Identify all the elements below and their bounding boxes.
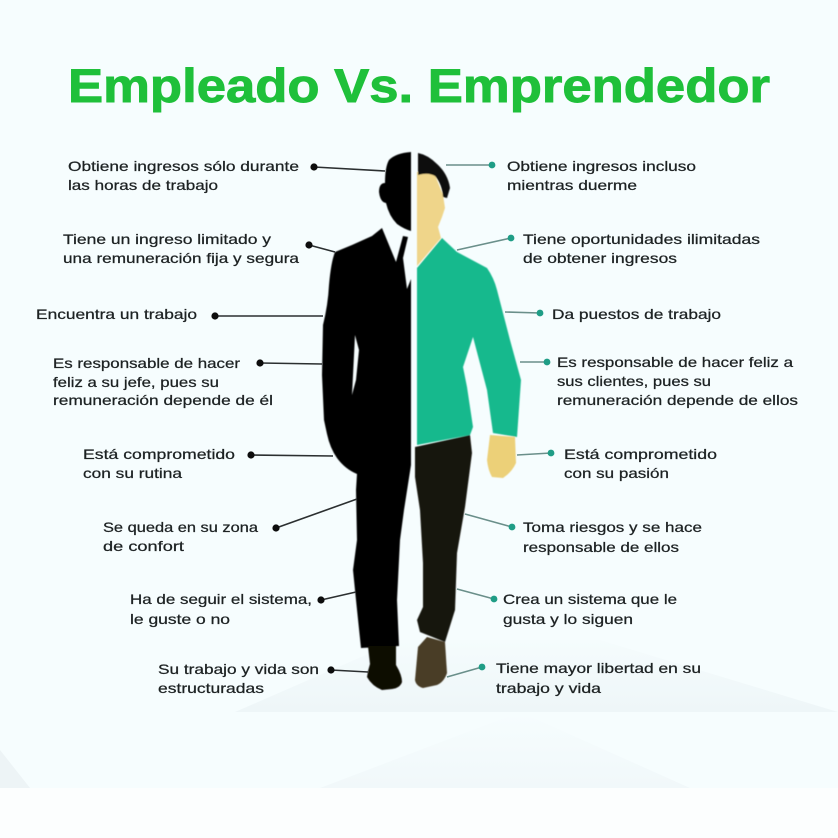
entrepreneur hand [487,435,516,478]
text: employee column: Obtiene ingresos sólo durante [68,158,299,174]
text: employee column: Se queda en su zona [103,519,258,535]
text: employee column: Su trabajo y vida son [158,661,319,677]
text: employee column [36,158,319,696]
text: entrepreneur column: sus clientes, pues su [557,373,711,389]
text: entrepreneur column: Tiene oportunidades ilimitadas [523,231,760,247]
title: Empleado Vs. Emprendedor [68,59,770,112]
employee shoe [367,646,402,690]
text: entrepreneur column: Crea un sistema que le [503,591,677,607]
text: entrepreneur column: Tiene mayor libertad en su [496,660,701,676]
text: employee column: de confort [103,538,184,554]
text: employee column: las horas de trabajo [68,177,218,193]
entrepreneur boot [415,637,447,688]
text: entrepreneur column: Da puestos de trabajo [552,306,721,322]
connectors: employee [211,163,385,674]
text: entrepreneur column: de obtener ingresos [523,250,677,266]
employee head [379,152,411,231]
text: entrepreneur column: gusta y lo siguen [503,611,633,627]
text: entrepreneur column: trabajo y vida [496,680,601,696]
entrepreneur hair [418,153,450,198]
entrepreneur skin [417,170,445,266]
text: employee column: feliz a su jefe, pues su [53,374,219,390]
text: employee column: remuneración depende de él [53,392,273,408]
text: entrepreneur column: remuneración depende de ellos [557,392,798,408]
entrepreneur shirt [417,238,521,445]
text: employee column: estructuradas [158,680,264,696]
entrepreneur trousers [415,435,472,642]
figure: entrepreneur [415,153,521,688]
text: entrepreneur column: mientras duerme [507,177,637,193]
text: employee column: Ha de seguir el sistema, [130,591,312,607]
text: employee column: una remuneración fija y segura [63,250,299,266]
text: employee column: con su rutina [83,465,182,481]
text: entrepreneur column: Está comprometido [564,446,717,462]
text: employee column: Es responsable de hacer [53,355,240,371]
text: entrepreneur column: Toma riesgos y se hace [523,519,702,535]
text: entrepreneur column: Es responsable de hacer feliz a [557,354,793,370]
employee suit [322,228,411,648]
text: employee column: Está comprometido [83,446,235,462]
text: employee column: le guste o no [130,611,230,627]
figure: employee silhouette [322,152,411,690]
text: entrepreneur column: Obtiene ingresos incluso [507,158,696,174]
connectors: entrepreneur [446,162,554,677]
text: entrepreneur column [496,158,798,696]
text: entrepreneur column: responsable de ellos [523,539,679,555]
text: employee column: Tiene un ingreso limitado y [63,231,271,247]
text: entrepreneur column: con su pasión [564,465,669,481]
text: employee column: Encuentra un trabajo [36,306,197,322]
